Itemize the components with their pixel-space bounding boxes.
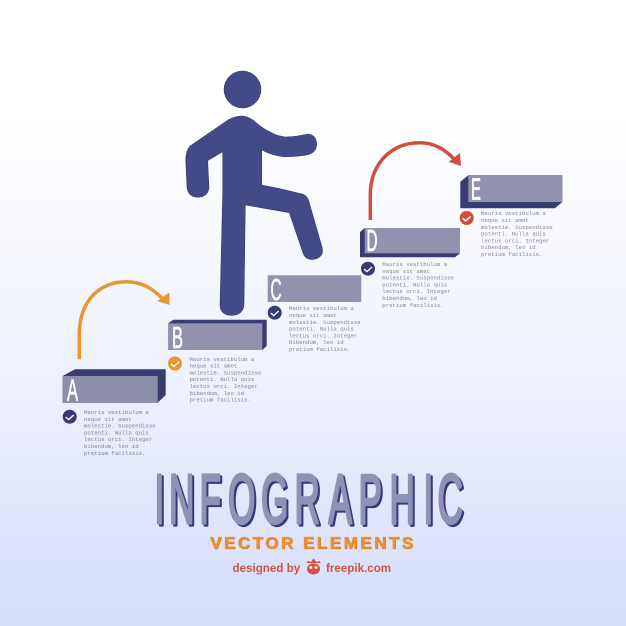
- step D: [360, 223, 460, 258]
- credit: designed by freepik.com: [232, 558, 391, 575]
- text block E: potenti. Nulla quis: [481, 231, 546, 238]
- text block D: potenti. Nulla quis: [382, 281, 447, 288]
- text block A: bibendum, leo id: [84, 443, 139, 450]
- text block C: neque sit amet: [289, 312, 337, 319]
- text block B: molestie. Suspendisse: [190, 369, 262, 376]
- text block C: molestie. Suspendisse: [289, 319, 361, 326]
- check icon A: [63, 410, 77, 424]
- text block E: lectus orci. Integer: [481, 237, 549, 244]
- subtitle: VECTOR ELEMENTS: VECTOR ELEMENTS: [210, 533, 413, 552]
- text block E: Mauris vestibulum a: [481, 210, 546, 217]
- text block D: bibendum, leo id: [382, 295, 437, 302]
- figure: person climbing steps: [186, 71, 323, 316]
- text block B: lectus orci. Integer: [190, 383, 258, 390]
- arrow: red D to E: [370, 143, 461, 220]
- text block C: bibendum, leo id: [289, 339, 344, 346]
- check icon D: [361, 262, 375, 276]
- step C: C: [270, 272, 282, 307]
- text block E: neque sit amet: [481, 217, 529, 224]
- step D: D: [366, 223, 378, 258]
- text block C: potenti. Nulla quis: [289, 326, 354, 333]
- text block B: potenti. Nulla quis: [190, 376, 254, 383]
- step E: E: [471, 172, 481, 206]
- check icon C: [268, 306, 282, 320]
- text block A: potenti. Nulla quis: [84, 429, 149, 436]
- step A: [63, 369, 166, 408]
- text block A: Mauris vestibulum a: [84, 409, 149, 416]
- subtitle: VECTOR ELEMENTS: VECTOR ELEMENTS: [211, 534, 414, 553]
- arrow: orange A to B: [79, 282, 170, 359]
- text block A: neque sit amet: [84, 416, 132, 423]
- step E: [460, 172, 562, 208]
- step B: [168, 320, 267, 355]
- icon: freepik logo: [306, 558, 321, 574]
- text block E: molestie. Suspendisse: [481, 224, 553, 231]
- text block B: pretium facilisis.: [190, 397, 251, 404]
- text block D: lectus orci. Integer: [382, 288, 451, 295]
- text block C: lectus orci. Integer: [289, 332, 357, 339]
- step A: A: [67, 372, 78, 408]
- text block C: pretium facilisis.: [289, 346, 350, 353]
- text block C: Mauris vestibulum a: [289, 305, 354, 312]
- credit: designed by freepik.com: freepik.com: [326, 562, 391, 575]
- text block E: pretium facilisis.: [481, 251, 542, 258]
- text block A: molestie. Suspendisse: [84, 423, 156, 430]
- text block B: Mauris vestibulum a: [190, 356, 255, 363]
- text block B: bibendum, leo id: [190, 390, 244, 397]
- check icon B: [168, 356, 182, 370]
- text block D: neque sit amet: [382, 268, 430, 275]
- check icon E: [460, 211, 474, 225]
- text block D: pretium facilisis.: [382, 302, 444, 309]
- step B: B: [172, 320, 183, 355]
- text block D: molestie. Suspendisse: [382, 275, 455, 282]
- text block E: bibendum, leo id: [481, 244, 536, 251]
- text block B: neque sit amet: [190, 363, 237, 370]
- text block D: Mauris vestibulum a: [382, 261, 448, 268]
- step C: [268, 272, 361, 307]
- title: INFOGRAPHIC: INFOGRAPHIC: [154, 460, 463, 538]
- title: INFOGRAPHIC: INFOGRAPHIC: [156, 462, 465, 540]
- text block A: lectus orci. Integer: [84, 436, 152, 443]
- credit: designed by freepik.com: designed by: [232, 562, 301, 575]
- text block A: pretium facilisis.: [84, 450, 145, 457]
